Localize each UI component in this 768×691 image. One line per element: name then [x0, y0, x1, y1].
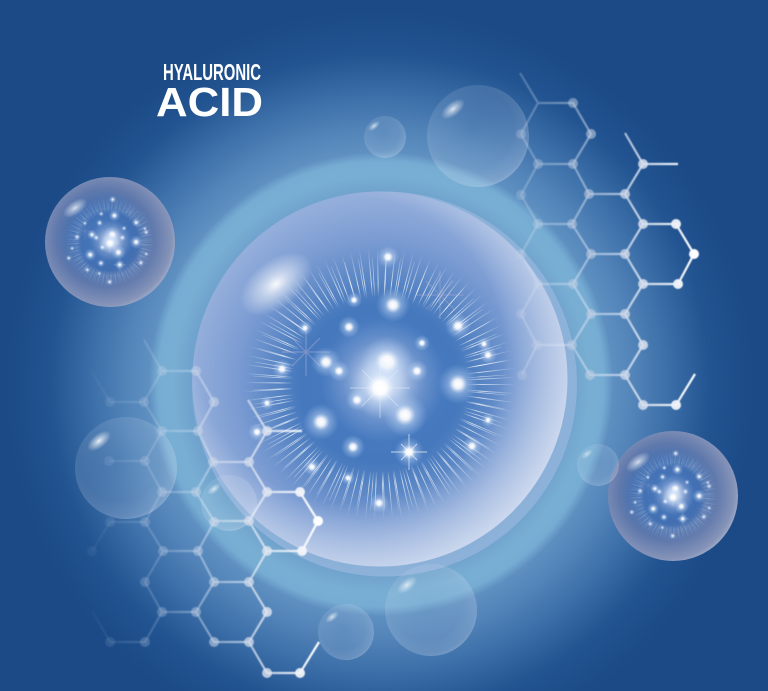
small sphere: right	[608, 431, 738, 561]
bubble: left large	[75, 417, 177, 519]
bubble: upper large	[427, 85, 529, 187]
hexagon molecule: lower left	[87, 340, 323, 678]
title: ACID	[156, 79, 263, 125]
bubble: upper small	[364, 116, 406, 158]
small sphere: left	[45, 177, 175, 307]
hexagon molecule: upper right	[516, 73, 699, 410]
bubble: right small	[577, 444, 619, 486]
title: HYALURONIC	[163, 59, 261, 85]
title	[156, 59, 263, 125]
sphere highlight	[228, 239, 324, 329]
bubble: bottom large	[385, 564, 477, 656]
main sphere	[192, 192, 577, 576]
bubble: left small	[201, 475, 257, 531]
central starburst	[248, 246, 497, 513]
bubble: bottom small	[318, 604, 374, 660]
glow ring	[149, 152, 613, 616]
